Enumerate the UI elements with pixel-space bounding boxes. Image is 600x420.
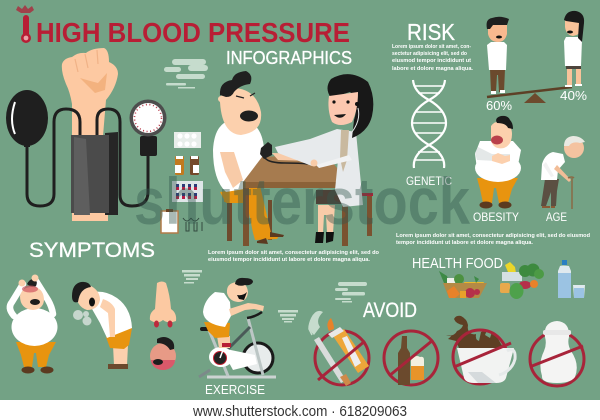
footer text: www.shutterstock.com · 618209063 (192, 404, 407, 420)
icon: vegetables and fruit pile (500, 262, 544, 299)
label: 60%: 60% (486, 98, 512, 113)
illustration: elderly man with cane (541, 136, 585, 209)
illustration: flushed face (150, 337, 176, 370)
caption: doctor scene: eiusmod tempor incididunt ut labore et dolore magna aliqua. (208, 257, 370, 263)
woman (567, 69, 581, 85)
icon: medicine set (161, 132, 203, 233)
patient arm and cuff (272, 153, 313, 161)
label: 40%: 40% (560, 88, 587, 103)
illustration: nose with nosebleed (150, 282, 176, 328)
decoration: smog cloud right (278, 310, 298, 322)
icon: DNA helix (412, 80, 446, 168)
label: obesity: OBESITY (473, 210, 519, 224)
illustration: obesity (475, 116, 521, 208)
patient (220, 186, 279, 240)
table (243, 154, 348, 182)
doctor coat (275, 129, 363, 207)
icon: no alcohol (384, 331, 438, 385)
caption: risk section: tempor incididunt ut labore et dolore magna aliqua. (396, 240, 533, 246)
decoration: smog cloud avoid (335, 282, 367, 302)
label: genetic: GENETIC (406, 174, 452, 188)
doctor head (328, 74, 373, 138)
illustration: man with headache (10, 274, 57, 374)
illustration: doctor measuring patient blood pressure (213, 71, 373, 246)
heading: health food: HEALTH FOOD (412, 256, 503, 272)
caption: doctor scene (208, 250, 380, 263)
patient stool (227, 198, 272, 241)
caption: doctor scene: Lorem ipsum dolor sit amet, consectetur adipisicing elit, sed do (208, 250, 380, 256)
watermark: shutterstock (134, 164, 470, 238)
illustration: man and woman on a seesaw (487, 11, 584, 103)
subtitle: INFOGRAPHICS (226, 48, 352, 68)
icon: vegetable basket (439, 271, 487, 298)
title: HIGH BLOOD PRESSURE (36, 17, 350, 48)
text block: risk: Lorem ipsum dolor sit amet, con- (392, 44, 471, 50)
icon: no salt jug (530, 321, 584, 386)
label: exercise: EXERCISE (205, 382, 265, 397)
text block: risk: eiusmod tempor incididunt ut (392, 58, 471, 64)
icon: water bottle and glass (558, 260, 585, 298)
man (490, 69, 505, 92)
decoration: smog cloud small (182, 270, 202, 284)
heading: risk: RISK (407, 19, 456, 45)
caption: risk section (396, 233, 591, 246)
decoration: smog cloud (164, 59, 208, 88)
text block: risk: sectetur adipisicing elit, sed do (392, 51, 468, 57)
caption: risk section: Lorem ipsum dolor sit amet, consectetur adipisicing elit, sed do eiusmod (396, 233, 591, 239)
doctor legs (318, 205, 335, 233)
label: age: AGE (546, 210, 567, 224)
doctor stool (367, 194, 372, 236)
icon: no smoking (309, 311, 369, 386)
text block: risk (392, 44, 473, 72)
icon: no coffee (446, 316, 515, 384)
illustration: man exercising on stationary bike (199, 278, 276, 377)
icon: thermometer (16, 5, 34, 43)
text block: risk: labore et dolore magna aliqua. (392, 66, 473, 72)
footer band (0, 400, 600, 420)
heading: avoid: AVOID (363, 299, 417, 322)
illustration: man coughing and bending (72, 282, 132, 369)
illustration: blood pressure cuff on arm (6, 48, 166, 221)
heading: symptoms: SYMPTOMS (29, 239, 155, 262)
